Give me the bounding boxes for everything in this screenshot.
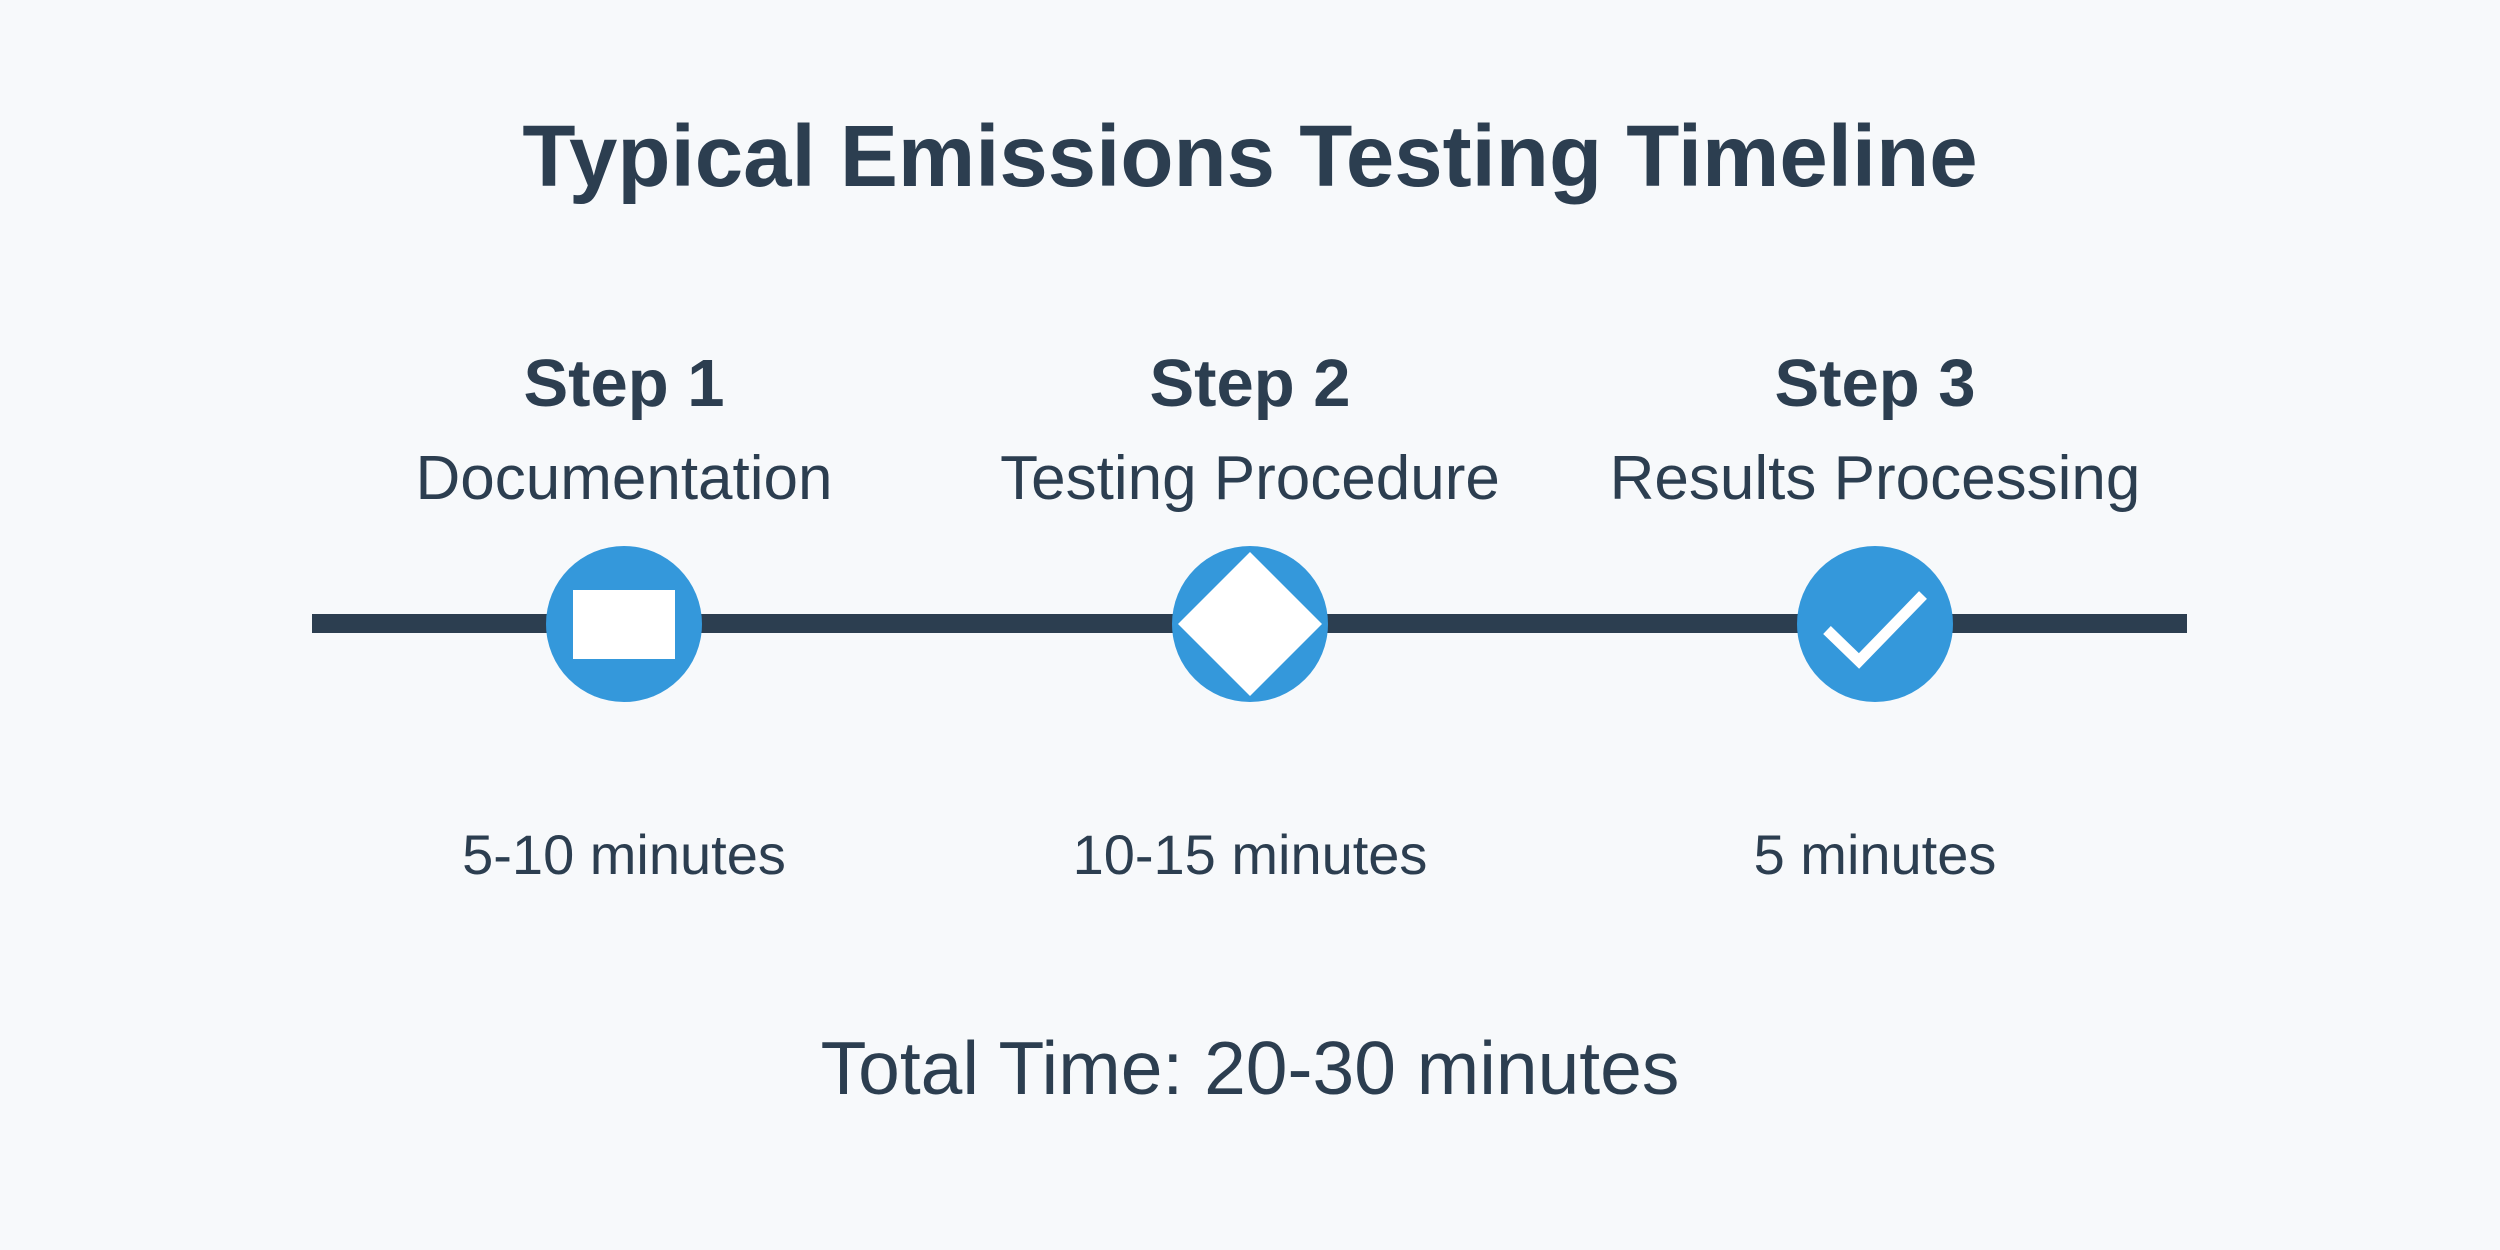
step 2 label: Testing Procedure xyxy=(1000,444,1500,513)
title: Typical Emissions Testing Timeline xyxy=(522,108,1978,205)
step 2 xyxy=(1000,346,1500,886)
icon: document circle xyxy=(546,546,702,702)
step 2 heading: Step 2 xyxy=(1149,346,1351,421)
step 2 duration: 10-15 minutes xyxy=(1073,823,1427,886)
step 1 xyxy=(415,346,833,886)
step 1 duration: 5-10 minutes xyxy=(462,823,786,886)
icon: checkmark circle xyxy=(1797,546,1953,702)
step 1 label: Documentation xyxy=(415,444,833,513)
step 3 xyxy=(1610,346,2140,886)
step 3 heading: Step 3 xyxy=(1774,346,1976,421)
step 1 heading: Step 1 xyxy=(523,346,725,421)
icon: diamond circle xyxy=(1172,546,1328,702)
step 3 label: Results Processing xyxy=(1610,444,2140,513)
step 3 duration: 5 minutes xyxy=(1754,823,1996,886)
total time: Total Time: 20-30 minutes xyxy=(821,1026,1679,1110)
timeline line xyxy=(312,614,2187,633)
